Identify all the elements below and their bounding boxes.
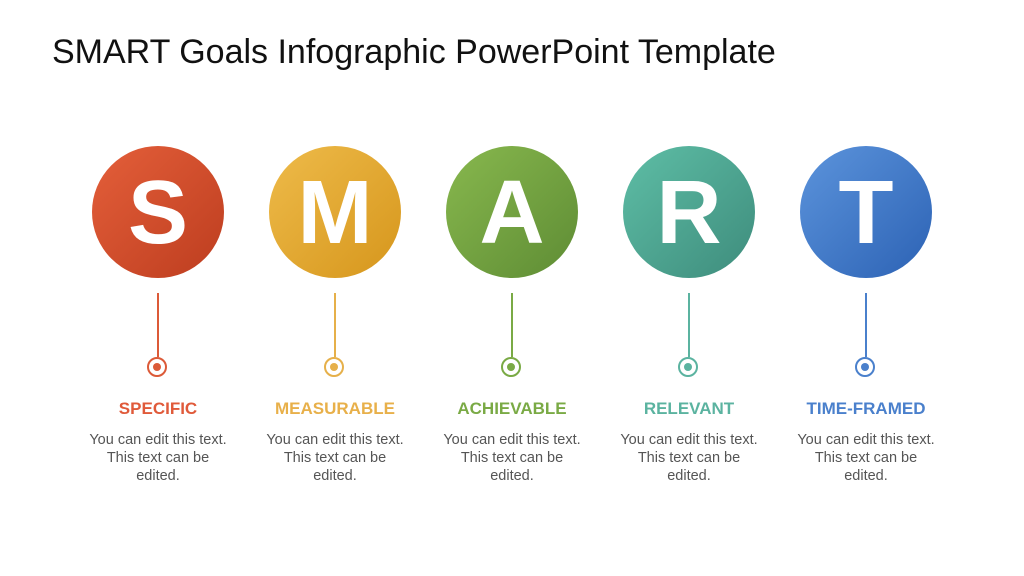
icon: S circle: S: [128, 163, 188, 263]
text: This text can be: [461, 450, 563, 466]
label: MEASURABLE: [275, 399, 395, 418]
connector line: [865, 293, 867, 357]
text: You can edit this text.: [620, 432, 758, 448]
connector line: [334, 293, 336, 357]
icon: R circle: R: [656, 163, 722, 263]
icon: T circle: T: [838, 163, 893, 263]
text: You can edit this text.: [797, 432, 935, 448]
text: [266, 432, 404, 484]
text: [620, 432, 758, 484]
text: edited.: [490, 468, 534, 484]
text: edited.: [136, 468, 180, 484]
panel: relevant: [620, 146, 758, 484]
panel: measurable: [266, 146, 404, 484]
label: RELEVANT: [644, 399, 734, 418]
text: edited.: [313, 468, 357, 484]
text: This text can be: [284, 450, 386, 466]
marker: [324, 357, 344, 377]
marker: [855, 357, 875, 377]
text: edited.: [844, 468, 888, 484]
icon: R circle: [623, 146, 755, 278]
text: You can edit this text.: [266, 432, 404, 448]
text: You can edit this text.: [89, 432, 227, 448]
text: This text can be: [815, 450, 917, 466]
marker: [501, 357, 521, 377]
text: edited.: [667, 468, 711, 484]
icon: S circle: [92, 146, 224, 278]
label: SPECIFIC: [119, 399, 197, 418]
connector line: [688, 293, 690, 357]
panel: achievable: [443, 146, 581, 484]
marker: [147, 357, 167, 377]
connector line: [511, 293, 513, 357]
text: [443, 432, 581, 484]
panel: time-framed: [797, 146, 935, 484]
icon: A circle: [446, 146, 578, 278]
icon: A circle: A: [480, 163, 544, 263]
label: TIME-FRAMED: [806, 399, 925, 418]
label: ACHIEVABLE: [457, 399, 567, 418]
text: [89, 432, 227, 484]
text: [797, 432, 935, 484]
icon: M circle: [269, 146, 401, 278]
icon: T circle: [800, 146, 932, 278]
text: This text can be: [107, 450, 209, 466]
marker: [678, 357, 698, 377]
text: This text can be: [638, 450, 740, 466]
panel: specific: [89, 146, 227, 484]
connector line: [157, 293, 159, 357]
text: You can edit this text.: [443, 432, 581, 448]
title: SMART Goals Infographic PowerPoint Template: [52, 33, 776, 71]
icon: M circle: M: [298, 163, 372, 263]
